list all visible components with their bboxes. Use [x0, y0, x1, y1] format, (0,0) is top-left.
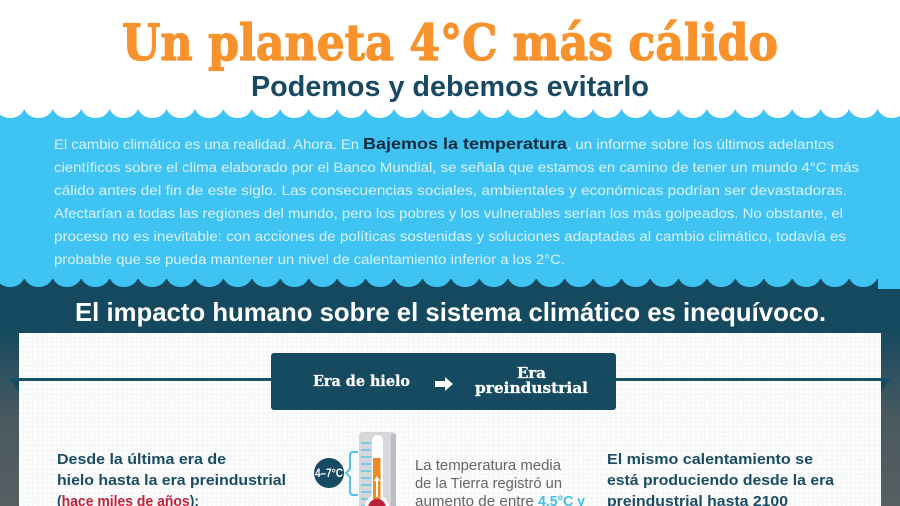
era label: preindustrial: Era — [517, 365, 547, 382]
icon: thermometer — [359, 432, 396, 506]
left text block: hielo hasta la era preindustrial — [57, 472, 286, 489]
intro text block: científicos sobre el clima elaborado por el Banco Mundial, se señala que estamos en camino de tener un mundo 4°C más — [54, 160, 859, 175]
left text block: Desde la última era de — [57, 451, 226, 468]
intro text block: Afectarían a todas las regiones del mundo, pero los pobres y los vulnerables serían los más golpeados. No obstante, el — [54, 206, 843, 221]
era label: preindustrial — [475, 365, 589, 397]
intro text block: , un informe sobre los últimos adelantos — [567, 137, 834, 152]
right text block — [607, 451, 835, 506]
title: Un planeta 4°C más cálido — [122, 13, 778, 72]
right text block: está produciendo desde la era — [607, 472, 835, 489]
arrow — [435, 377, 453, 391]
badge: 4–7°C — [314, 458, 344, 488]
intro text block: cálido antes del fin de este siglo. Las consecuencias sociales, ambientales y económicas podrían ser devastadoras. — [54, 183, 847, 198]
era banner — [271, 353, 616, 410]
badge: 4–7°C: 4–7°C — [315, 468, 343, 480]
era label: preindustrial: preindustrial — [475, 380, 589, 397]
intro text block — [54, 136, 859, 267]
middle text block — [415, 458, 585, 506]
icon: bracket — [346, 452, 358, 495]
intro text block: El cambio climático es una realidad. Ahora. En — [54, 137, 359, 152]
intro text block: proceso no es inevitable: con acciones de políticas sostenidas y soluciones adaptadas al cambio climático, todavía es — [54, 229, 846, 244]
panel: dotted content area — [19, 333, 881, 506]
right text block: El mismo calentamiento se — [607, 451, 813, 468]
panel: dark background — [0, 278, 900, 506]
intro text block: Bajemos la temperatura — [363, 136, 567, 153]
left text block — [57, 451, 286, 506]
section heading: El impacto humano sobre el sistema climático es inequívoco. — [75, 297, 826, 327]
timeline ribbon — [10, 378, 890, 393]
intro text block: probable que se pueda mantener un nivel de calentamiento inferior a los 2°C. — [54, 252, 565, 267]
middle text block: de la Tierra registró un — [415, 476, 562, 492]
panel: blue intro band — [0, 109, 900, 279]
subtitle: Podemos y debemos evitarlo — [251, 71, 649, 103]
middle text block: La temperatura media — [415, 458, 562, 474]
era label: ice age: Era de hielo — [313, 373, 410, 390]
